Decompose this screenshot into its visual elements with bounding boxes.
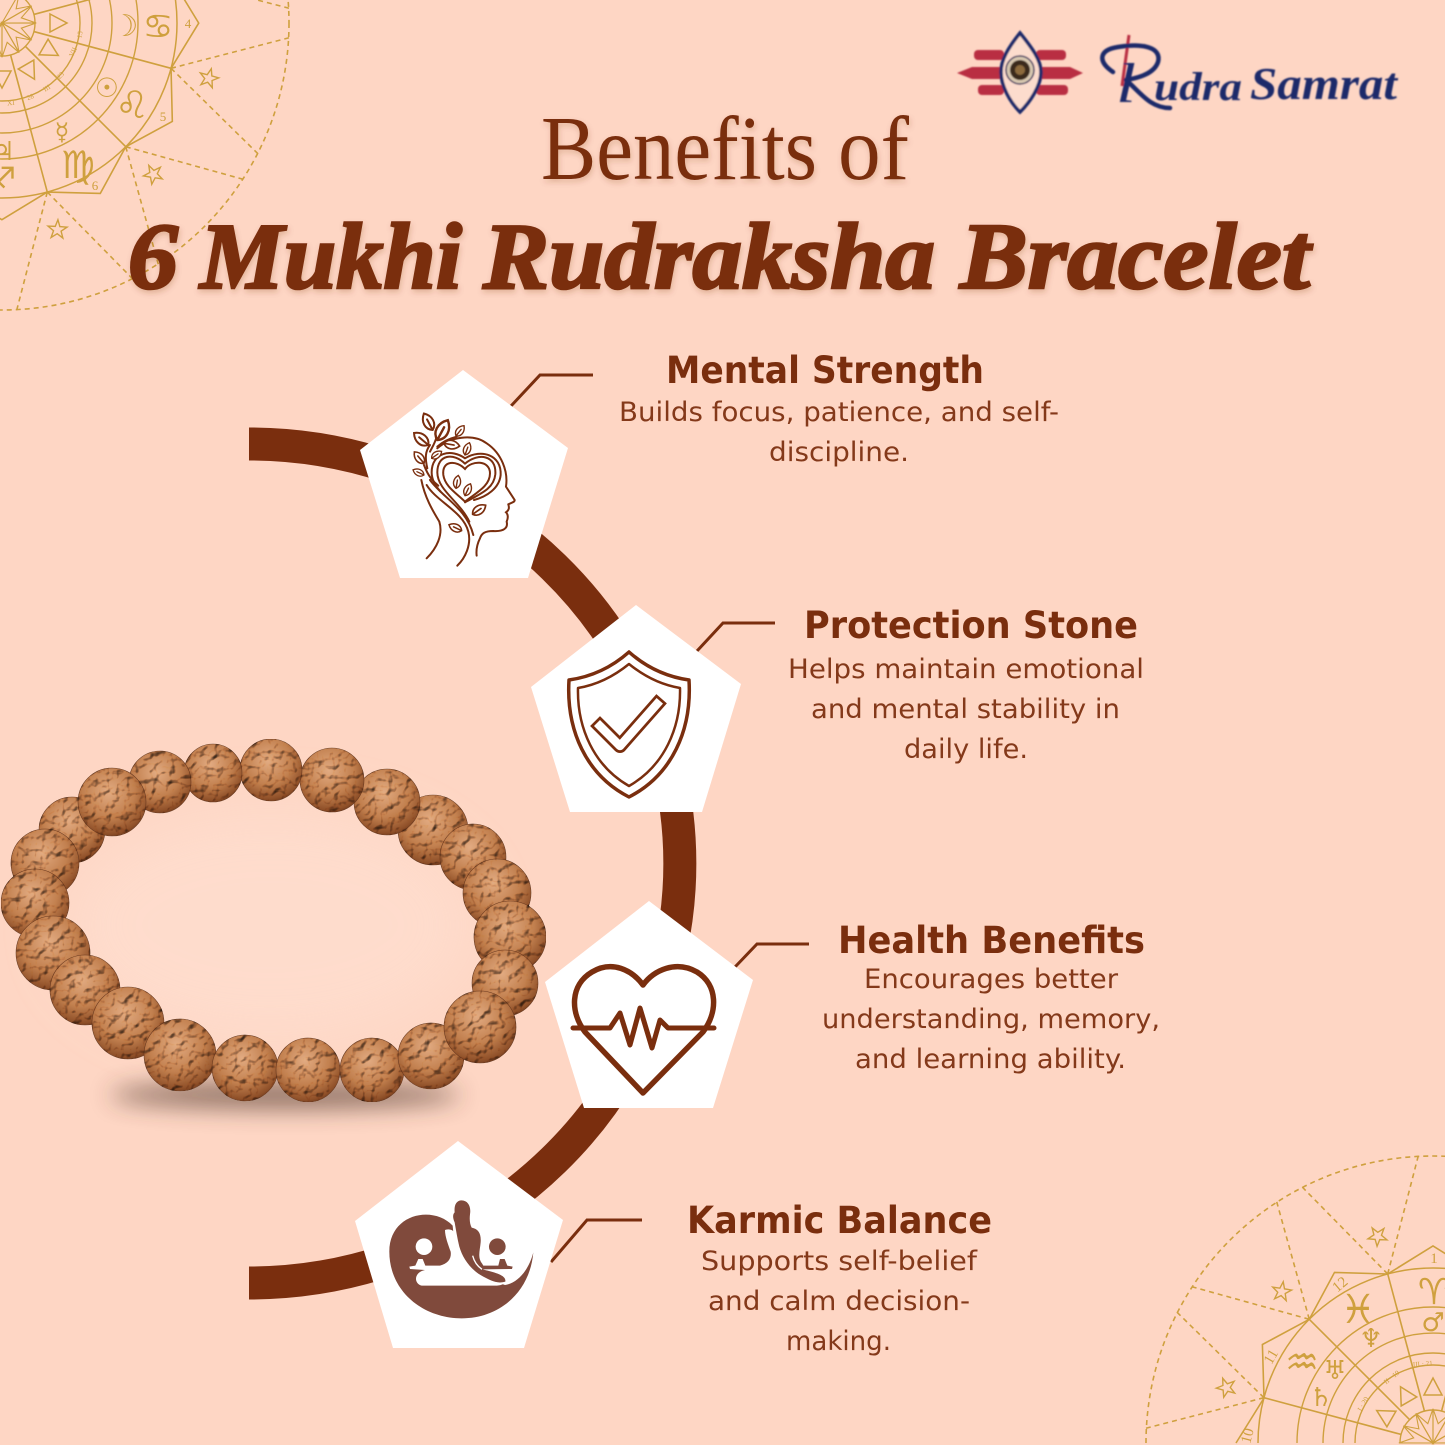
decoration: zodiac wheel top left: ☽	[112, 9, 138, 44]
title line 2: Bracelet	[959, 205, 1313, 309]
decoration: zodiac wheel bottom right	[1146, 1156, 1445, 1445]
decoration: zodiac wheel bottom right: 12	[1330, 1274, 1351, 1296]
decoration: zodiac wheel top left: 4	[185, 16, 192, 31]
heading: Health Benefits	[838, 919, 1145, 962]
decoration: zodiac wheel top left: 28	[26, 92, 35, 102]
description: and mental stability in	[811, 694, 1120, 725]
decoration: zodiac wheel top left: 5	[160, 109, 166, 124]
panel: Protection Stone	[531, 604, 1144, 812]
description: and calm decision-	[708, 1286, 970, 1317]
leader line	[551, 1220, 642, 1262]
decoration: zodiac wheel top left: 6	[92, 178, 99, 193]
description	[619, 397, 1059, 468]
logo wordmark	[1102, 35, 1398, 115]
title line 2: Rudraksha	[482, 205, 935, 309]
decoration: zodiac wheel top left: 23	[55, 70, 66, 81]
logo emblem	[957, 33, 1083, 112]
icon: heart with pulse	[573, 967, 714, 1093]
description: Helps maintain emotional	[788, 654, 1144, 685]
decoration: zodiac wheel top left: 15	[75, 30, 85, 39]
title line 1: Benefits	[541, 98, 817, 199]
icon: meditating figures yin yang	[389, 1200, 533, 1318]
logo wordmark: udra	[1154, 64, 1242, 109]
title line 2: Mukhi	[198, 205, 462, 309]
decoration: zodiac wheel top left	[0, 0, 289, 310]
decoration: zodiac wheel top left: ♍	[61, 143, 95, 187]
decoration: zodiac wheel bottom right: 1	[1430, 1251, 1438, 1267]
leader line	[735, 944, 809, 967]
decoration: zodiac wheel top left: ☿	[55, 118, 69, 146]
title line 2: 6	[128, 205, 178, 309]
logo: Rudra Samrat	[957, 33, 1398, 115]
logo wordmark: l	[1116, 53, 1136, 115]
description: and learning ability.	[855, 1044, 1126, 1075]
decoration: zodiac wheel top left: ♌	[115, 83, 149, 127]
pentagon badge	[360, 370, 568, 578]
decoration: zodiac wheel top left: III	[42, 83, 53, 94]
panel: Mental Strength	[360, 349, 1059, 578]
icon: shield with check	[569, 652, 689, 797]
decoration: zodiac wheel bottom right: ♂	[1421, 1308, 1445, 1338]
panel: Karmic Balance	[355, 1141, 992, 1357]
description: daily life.	[904, 734, 1028, 765]
bracelet photo	[1, 739, 546, 1109]
description: Builds focus, patience, and self-	[619, 397, 1059, 428]
heading: Mental Strength	[666, 349, 984, 392]
decoration: zodiac wheel top left: ♋	[143, 7, 173, 47]
description	[822, 964, 1160, 1075]
panel: Health Benefits	[545, 901, 1160, 1108]
bracelet shadow	[110, 1081, 460, 1109]
decoration: zodiac wheel bottom right: ♅	[1323, 1356, 1347, 1386]
pentagon badge	[531, 605, 741, 812]
description: discipline.	[769, 437, 909, 468]
decoration: zodiac wheel top left: VII	[68, 45, 79, 58]
title line 1: of	[838, 98, 910, 199]
pentagon badge	[545, 901, 753, 1108]
logo wordmark: Samrat	[1250, 58, 1398, 109]
description: making.	[786, 1326, 891, 1357]
description: Encourages better	[864, 964, 1119, 995]
decoration: zodiac wheel bottom right: II · 19	[1382, 1369, 1402, 1386]
title	[128, 98, 1313, 309]
decoration: zodiac wheel bottom right: ♓	[1340, 1287, 1376, 1333]
leader line	[697, 623, 775, 651]
decoration: zodiac wheel bottom right: I · 20	[1356, 1395, 1371, 1413]
decoration: zodiac wheel bottom right: ♒	[1285, 1340, 1319, 1384]
icon: head with heart and vines	[411, 411, 515, 566]
description: understanding, memory,	[822, 1004, 1160, 1035]
heading: Protection Stone	[804, 604, 1138, 647]
decoration: zodiac wheel top left: ☉	[95, 73, 119, 104]
decoration: zodiac wheel bottom right: III · 21	[1413, 1359, 1434, 1369]
decoration: zodiac wheel bottom right: 10	[1238, 1427, 1258, 1445]
description: Supports self-belief	[701, 1246, 979, 1277]
beads	[1, 739, 546, 1102]
decoration: zodiac wheel bottom right: 11	[1261, 1347, 1282, 1367]
leader line	[511, 375, 593, 406]
curved connector arc	[249, 444, 680, 1283]
decoration: zodiac wheel bottom right: ♄	[1309, 1383, 1333, 1413]
bracelet glow	[65, 810, 475, 1040]
decoration: zodiac wheel bottom right: ♆	[1359, 1324, 1383, 1354]
decoration: zodiac wheel top left: XI	[7, 99, 16, 107]
heading: Karmic Balance	[687, 1199, 992, 1242]
description	[788, 654, 1144, 765]
title line 2	[128, 205, 1313, 309]
pentagon badge	[355, 1141, 563, 1348]
description	[701, 1246, 979, 1357]
